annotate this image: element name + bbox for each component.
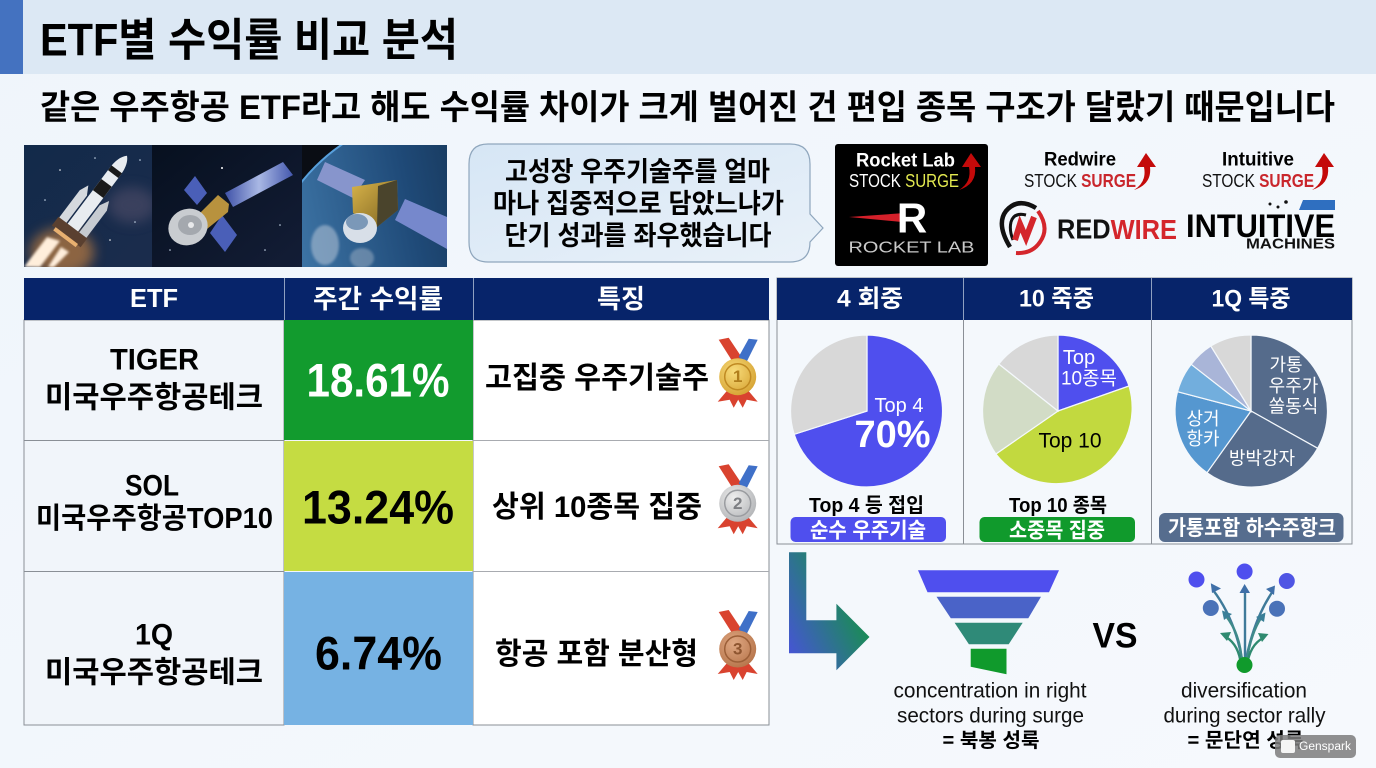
table header: 특징: [597, 284, 645, 314]
row: SOL: 상위 10종목 집중: [492, 491, 702, 524]
pie chart: 1Q diversified: 가통: [1269, 355, 1303, 375]
pie chart: Top 4 70%: Top 4: [875, 395, 923, 417]
text: concentration: = 북봉 성룩: [942, 729, 1040, 752]
row: 1Q: 미국우주항공테크: [45, 656, 263, 690]
logo: Rocket Lab stock surge: STOCK SURGE: [849, 171, 959, 191]
row: TIGER: [45, 320, 709, 440]
callout bubble: [469, 144, 823, 262]
caption: Top 10: Top 10 종목: [1009, 495, 1107, 517]
pie chart: Top 10: [983, 335, 1132, 484]
panel: concentration pie charts: [777, 278, 1352, 544]
title bar: [0, 0, 1376, 74]
watermark: Genspark: [1275, 735, 1356, 758]
row: SOL: SOL: [125, 470, 179, 502]
arrow: bent green to blue: [789, 552, 870, 670]
pie chart: 1Q diversified: 우주가: [1269, 376, 1318, 396]
title: ETF별 수익률 비교 분석: [40, 14, 458, 66]
panel header: 1Q 특중: [1212, 286, 1290, 312]
logo: Intuitive Machines stock surge: Intuitive: [1222, 150, 1294, 170]
row: 1Q: 1Q: [135, 618, 173, 652]
row: TIGER: TIGER: [110, 344, 199, 376]
table header: [24, 278, 769, 320]
text: concentration: sectors during surge: [897, 704, 1084, 728]
logo: Redwire stock surge: REDWIRE: [1057, 214, 1177, 244]
panel header: [777, 278, 1352, 320]
caption: 1Q: 가통포함 하수주항크: [1168, 517, 1336, 540]
icon: gold medal: [718, 338, 758, 408]
row: SOL: 미국우주항공TOP10: [36, 502, 273, 535]
caption: Top 4: 순수 우주기술: [810, 520, 926, 542]
logo: Intuitive Machines stock surge: [1186, 150, 1335, 252]
watermark: Genspark: Genspark: [1299, 741, 1351, 753]
icon: funnel: [918, 570, 1059, 674]
pie chart: Top 10: Top: [1063, 347, 1095, 369]
image: rocket launch: [24, 145, 156, 276]
logo: Intuitive Machines stock surge: INTUITIVE: [1186, 208, 1335, 244]
logo: Rocket Lab stock surge: [835, 144, 988, 266]
pie chart: Top 4 70%: 70%: [854, 414, 931, 456]
caption: Top 4: [790, 494, 946, 542]
pie chart: 1Q diversified: 방박강자: [1229, 448, 1296, 468]
row: 1Q: [45, 572, 698, 725]
logo: Rocket Lab stock surge: Rocket Lab: [856, 150, 955, 172]
caption: Top 10: [980, 495, 1135, 542]
row: TIGER: 미국우주항공테크: [45, 382, 263, 414]
comparison table: [24, 278, 769, 725]
icon: bronze medal: 3: [733, 640, 742, 658]
caption: Top 4: Top 4 등 접입: [809, 494, 924, 517]
logo: Redwire stock surge: STOCK SURGE: [1024, 171, 1136, 191]
image strip: rocket and satellites: [24, 145, 447, 267]
text: diversification: [1164, 680, 1326, 752]
icon: silver medal: 2: [733, 494, 742, 513]
logo: Rocket Lab stock surge: ROCKET LAB: [848, 240, 974, 256]
pie chart: Top 10: 10종목: [1061, 368, 1117, 390]
panel header: 10 죽중: [1019, 286, 1094, 312]
panel header: 4 회중: [837, 286, 903, 312]
callout text: 마나 집중적으로 담았느냐가: [493, 189, 784, 219]
table header: 주간 수익률: [313, 284, 443, 314]
logo: Rocket Lab stock surge: R: [897, 194, 927, 242]
text: concentration: [894, 680, 1087, 752]
text: concentration: concentration in right: [894, 680, 1087, 702]
pie chart: 1Q diversified: 상거: [1186, 409, 1220, 429]
row: TIGER: 고집중 우주기술주: [485, 362, 709, 395]
logo: Intuitive Machines stock surge: STOCK SURGE: [1202, 171, 1314, 191]
callout text: [493, 157, 784, 251]
icon: diversification fan: [1188, 564, 1295, 673]
logo: Intuitive Machines stock surge: MACHINES: [1246, 236, 1335, 252]
label: VS: VS: [1092, 616, 1138, 656]
subtitle: 같은 우주항공 ETF라고 해도 수익률 차이가 크게 벌어진 건 편입 종목 구조가 달랐기 때문입니다: [40, 89, 1335, 127]
callout text: 단기 성과를 좌우했습니다: [504, 221, 772, 251]
pie chart: 1Q diversified: 항카: [1186, 429, 1220, 449]
pie chart: Top 4 70%: [791, 335, 943, 487]
logo: Redwire stock surge: [1002, 150, 1177, 253]
logo: Redwire stock surge: Redwire: [1044, 150, 1116, 170]
pie chart: 1Q diversified: 쏠동식: [1269, 396, 1318, 416]
pie chart: Top 10: Top 10: [1038, 430, 1102, 452]
pie chart: 1Q diversified: [1175, 335, 1327, 487]
text: diversification: diversification: [1181, 680, 1307, 702]
row: 1Q: 항공 포함 분산형: [495, 638, 698, 671]
image: satellite with dish: [152, 145, 302, 267]
caption: Top 10: 소중목 집중: [1009, 520, 1105, 542]
icon: bronze medal: [718, 610, 758, 680]
callout text: 고성장 우주기술주를 얼마: [505, 157, 770, 187]
icon: gold medal: 1: [733, 367, 742, 386]
text: diversification: during sector rally: [1164, 704, 1326, 728]
row: 1Q: 6.74%: [315, 626, 442, 680]
row: SOL: [36, 441, 702, 571]
table header: ETF: [130, 283, 178, 313]
image: satellite over earth: [302, 145, 447, 267]
icon: silver medal: [718, 464, 758, 534]
row: SOL: 13.24%: [302, 480, 454, 534]
row: TIGER: 18.61%: [306, 354, 450, 406]
text: diversification: = 문단연 성룩: [1188, 729, 1304, 752]
